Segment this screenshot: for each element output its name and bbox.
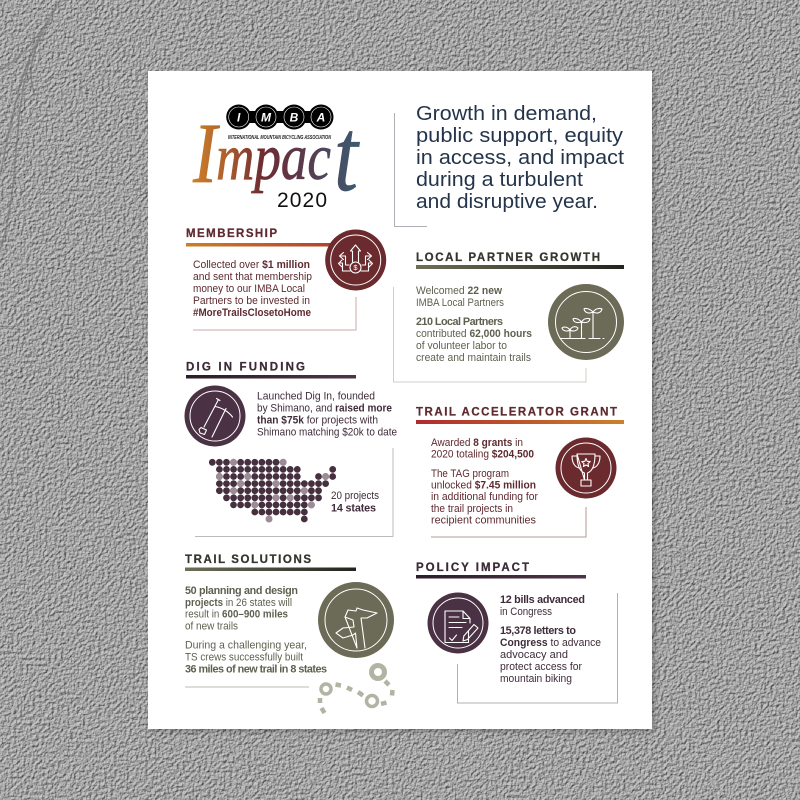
intro bracket	[394, 113, 427, 226]
dig in bracket	[195, 448, 393, 536]
local partner text	[416, 285, 532, 364]
title: Impact	[192, 98, 360, 213]
IMBA logo	[226, 104, 334, 141]
dig in text: Shimano matching $20k to date	[257, 426, 397, 438]
trail accelerator text: The TAG program	[431, 468, 509, 480]
trail accelerator bar	[416, 420, 624, 424]
trail solutions text: TS crews successfully built	[185, 652, 303, 664]
membership heading: MEMBERSHIP	[186, 228, 277, 240]
local partner text: Welcomed 22 new	[416, 285, 503, 297]
intro statement: in access, and impact	[416, 146, 624, 169]
trail solutions text	[185, 585, 327, 676]
intro statement: Growth in demand,	[416, 102, 597, 125]
trail solutions text: projects in 26 states will	[185, 597, 292, 609]
policy text: in Congress	[500, 606, 553, 618]
membership bracket	[193, 297, 356, 330]
trail accelerator text	[431, 437, 538, 526]
trail accelerator heading: TRAIL ACCELERATOR GRANT	[416, 406, 617, 418]
intro statement	[416, 102, 624, 213]
map stat text: 14 states	[331, 502, 376, 514]
icon: growing plants	[548, 284, 624, 360]
dot map of the United States	[212, 462, 333, 519]
map stat text	[331, 490, 380, 514]
panel: trail accelerator grant	[416, 406, 624, 537]
trail solutions bar	[185, 568, 356, 571]
local partner text: IMBA Local Partners	[416, 297, 505, 309]
policy heading: POLICY IMPACT	[416, 562, 529, 574]
membership text: money to our IMBA Local	[193, 283, 305, 295]
white poster card	[148, 71, 652, 729]
trail accelerator text: unlocked $7.45 million	[431, 480, 536, 492]
policy text: advocacy and	[500, 649, 568, 661]
IMBA logo: INTERNATIONAL MOUNTAIN BICYCLING ASSOCIATION	[228, 135, 331, 141]
icon: trophy	[556, 438, 616, 498]
local partner text: of volunteer labor to	[416, 340, 507, 352]
policy text: 12 bills advanced	[500, 594, 585, 606]
local partner text: contributed 62,000 hours	[416, 328, 532, 340]
icon: money arrows: $	[353, 263, 358, 272]
dig in text	[257, 390, 397, 438]
icon: pickaxe and shovel	[184, 386, 246, 446]
panel: dig in funding	[184, 362, 397, 536]
trail accelerator text: 2020 totaling $204,500	[431, 448, 534, 460]
year 2020: 2020	[277, 189, 327, 212]
map stat text: 20 projects	[331, 490, 380, 502]
dig in bar	[186, 375, 356, 378]
membership text: Partners to be invested in	[193, 295, 310, 307]
trail solutions text: of new trails	[185, 620, 239, 632]
IMBA logo: I	[237, 110, 241, 124]
panel: membership	[186, 228, 386, 330]
local partner heading: LOCAL PARTNER GROWTH	[416, 252, 600, 264]
IMBA logo: M	[261, 110, 272, 124]
icon: signpost	[318, 582, 394, 658]
dig in text: Launched Dig In, founded	[257, 390, 375, 402]
IMBA logo: B	[290, 110, 299, 124]
trail solutions text: 36 miles of new trail in 8 states	[185, 664, 327, 676]
intro statement: public support, equity	[416, 124, 624, 147]
local partner text: create and maintain trails	[416, 352, 532, 364]
trail solutions text: During a challenging year,	[185, 640, 307, 652]
membership text: and sent that membership	[193, 271, 312, 283]
panel: trail solutions	[185, 554, 394, 713]
panel: policy impact	[416, 562, 618, 703]
trail accelerator text: Awarded 8 grants in	[431, 437, 523, 449]
membership text: #MoreTrailsClosetoHome	[193, 307, 311, 319]
policy text: protect access for	[500, 661, 582, 673]
policy bar	[416, 575, 586, 578]
policy text: 15,378 letters to	[500, 625, 576, 637]
icon: money arrows	[325, 230, 386, 290]
icon: document and pencil	[428, 592, 488, 654]
local partner bar	[416, 265, 624, 269]
title: Impact: I	[192, 105, 220, 201]
local partner text: 210 Local Partners	[416, 316, 503, 328]
trail solutions text: result in 600–900 miles	[185, 608, 288, 620]
membership text	[193, 259, 312, 319]
trail accelerator text: the trail projects in	[431, 503, 513, 515]
icon: dashed trail route	[320, 666, 392, 713]
trail solutions text: 50 planning and design	[185, 585, 298, 597]
intro statement: during a turbulent	[416, 168, 583, 191]
IMBA logo: A	[316, 110, 325, 124]
policy bracket	[458, 593, 618, 703]
dig in heading: DIG IN FUNDING	[186, 362, 305, 374]
local partner bracket	[394, 287, 586, 382]
trail accelerator text: recipient communities	[431, 514, 537, 526]
policy text: Congress to advance	[500, 637, 601, 649]
panel: local partner growth	[394, 252, 624, 382]
policy text: mountain biking	[500, 673, 572, 685]
membership text: Collected over $1 million	[193, 259, 310, 271]
intro statement: and disruptive year.	[416, 190, 598, 213]
trail accelerator bracket	[431, 507, 586, 537]
trail accelerator text: in additional funding for	[431, 491, 538, 503]
card shadow	[151, 74, 654, 731]
dig in text: than $75k for projects with	[257, 414, 378, 426]
title: Impact: t	[334, 98, 360, 213]
dig in text: by Shimano, and raised more	[257, 402, 392, 414]
trail solutions heading: TRAIL SOLUTIONS	[185, 554, 311, 566]
policy text	[500, 594, 601, 685]
trail solutions rule	[185, 686, 309, 688]
membership bar	[186, 243, 332, 246]
title: Impact: mpac	[216, 121, 331, 194]
